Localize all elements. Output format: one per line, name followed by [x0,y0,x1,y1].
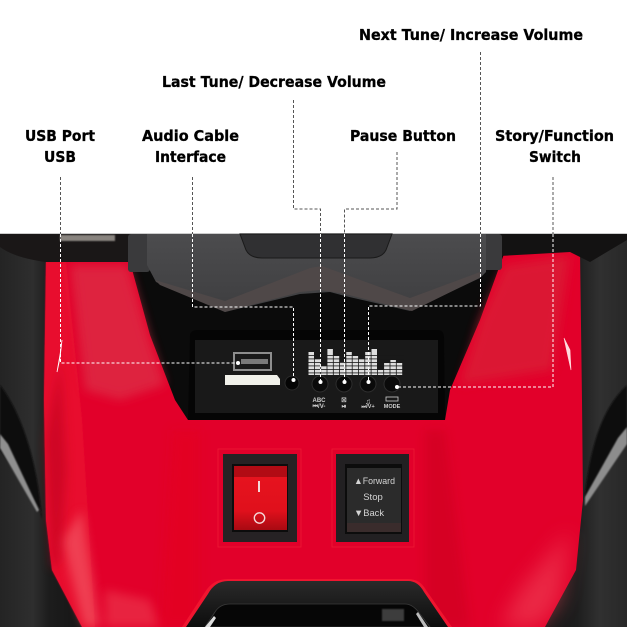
label: Story/Function Switch: Switch [529,148,581,166]
audio control panel [188,330,445,420]
leader line: USB port [60,177,240,365]
callout: pause button [342,127,456,384]
highlight glints [57,338,571,372]
button labels: MODE [384,404,401,410]
red body [44,250,583,627]
leader line: mode button [395,177,553,389]
grey hood [128,234,502,312]
callout: last tune [162,73,386,384]
callout: next tune [359,26,583,384]
buttons [312,376,400,392]
button labels: ABC [312,398,326,404]
label: Audio Cable Interface: Interface [155,148,226,166]
right tire [517,234,627,627]
direction switch: ▲Forward [354,476,395,487]
label: Last Tune: Last Tune/ Decrease Volume [162,73,386,91]
direction switch: ▼Back [354,508,384,519]
button labels: ⏭/V+ [361,404,375,410]
right handlebar [500,234,627,262]
leader line: audio jack [192,177,296,382]
direction switch: Stop [363,492,383,503]
power rocker switch [218,449,301,547]
label: Audio Cable Interface [142,127,239,166]
button labels [312,397,401,410]
callout: USB port [25,127,240,365]
left handlebar [0,234,130,262]
central black recess [125,234,510,434]
button labels: ⏯ [342,404,347,410]
white label strip [225,375,280,385]
label: USB Port: USB Port [25,127,95,145]
leader line: last tune button [294,100,322,384]
USB port [233,352,272,371]
label: USB Port: USB [44,148,76,166]
callout: story/function switch [395,127,614,389]
left tire [0,234,110,627]
label: Next Tune: Next Tune/ Increase Volume [359,26,583,44]
button labels: ♫ [365,397,371,406]
bottom black cutout [182,579,452,627]
label: Story/Function Switch: Story/Function [495,127,614,145]
label: USB Port [25,127,95,166]
label: Pause Button: Pause Button [350,127,456,145]
direction switch [332,449,414,547]
audio jack [285,376,299,390]
equalizer display [308,349,404,375]
leader line: next tune button [366,52,480,384]
leader line: pause button [342,152,397,384]
callout: audio cable interface [142,127,296,382]
button labels: ⏮/V- [313,404,325,410]
button labels: ☒ [341,397,347,404]
photo: ride-on car dashboard [0,233,627,627]
label: Story/Function Switch [495,127,614,166]
label: Audio Cable Interface: Audio Cable [142,127,239,145]
